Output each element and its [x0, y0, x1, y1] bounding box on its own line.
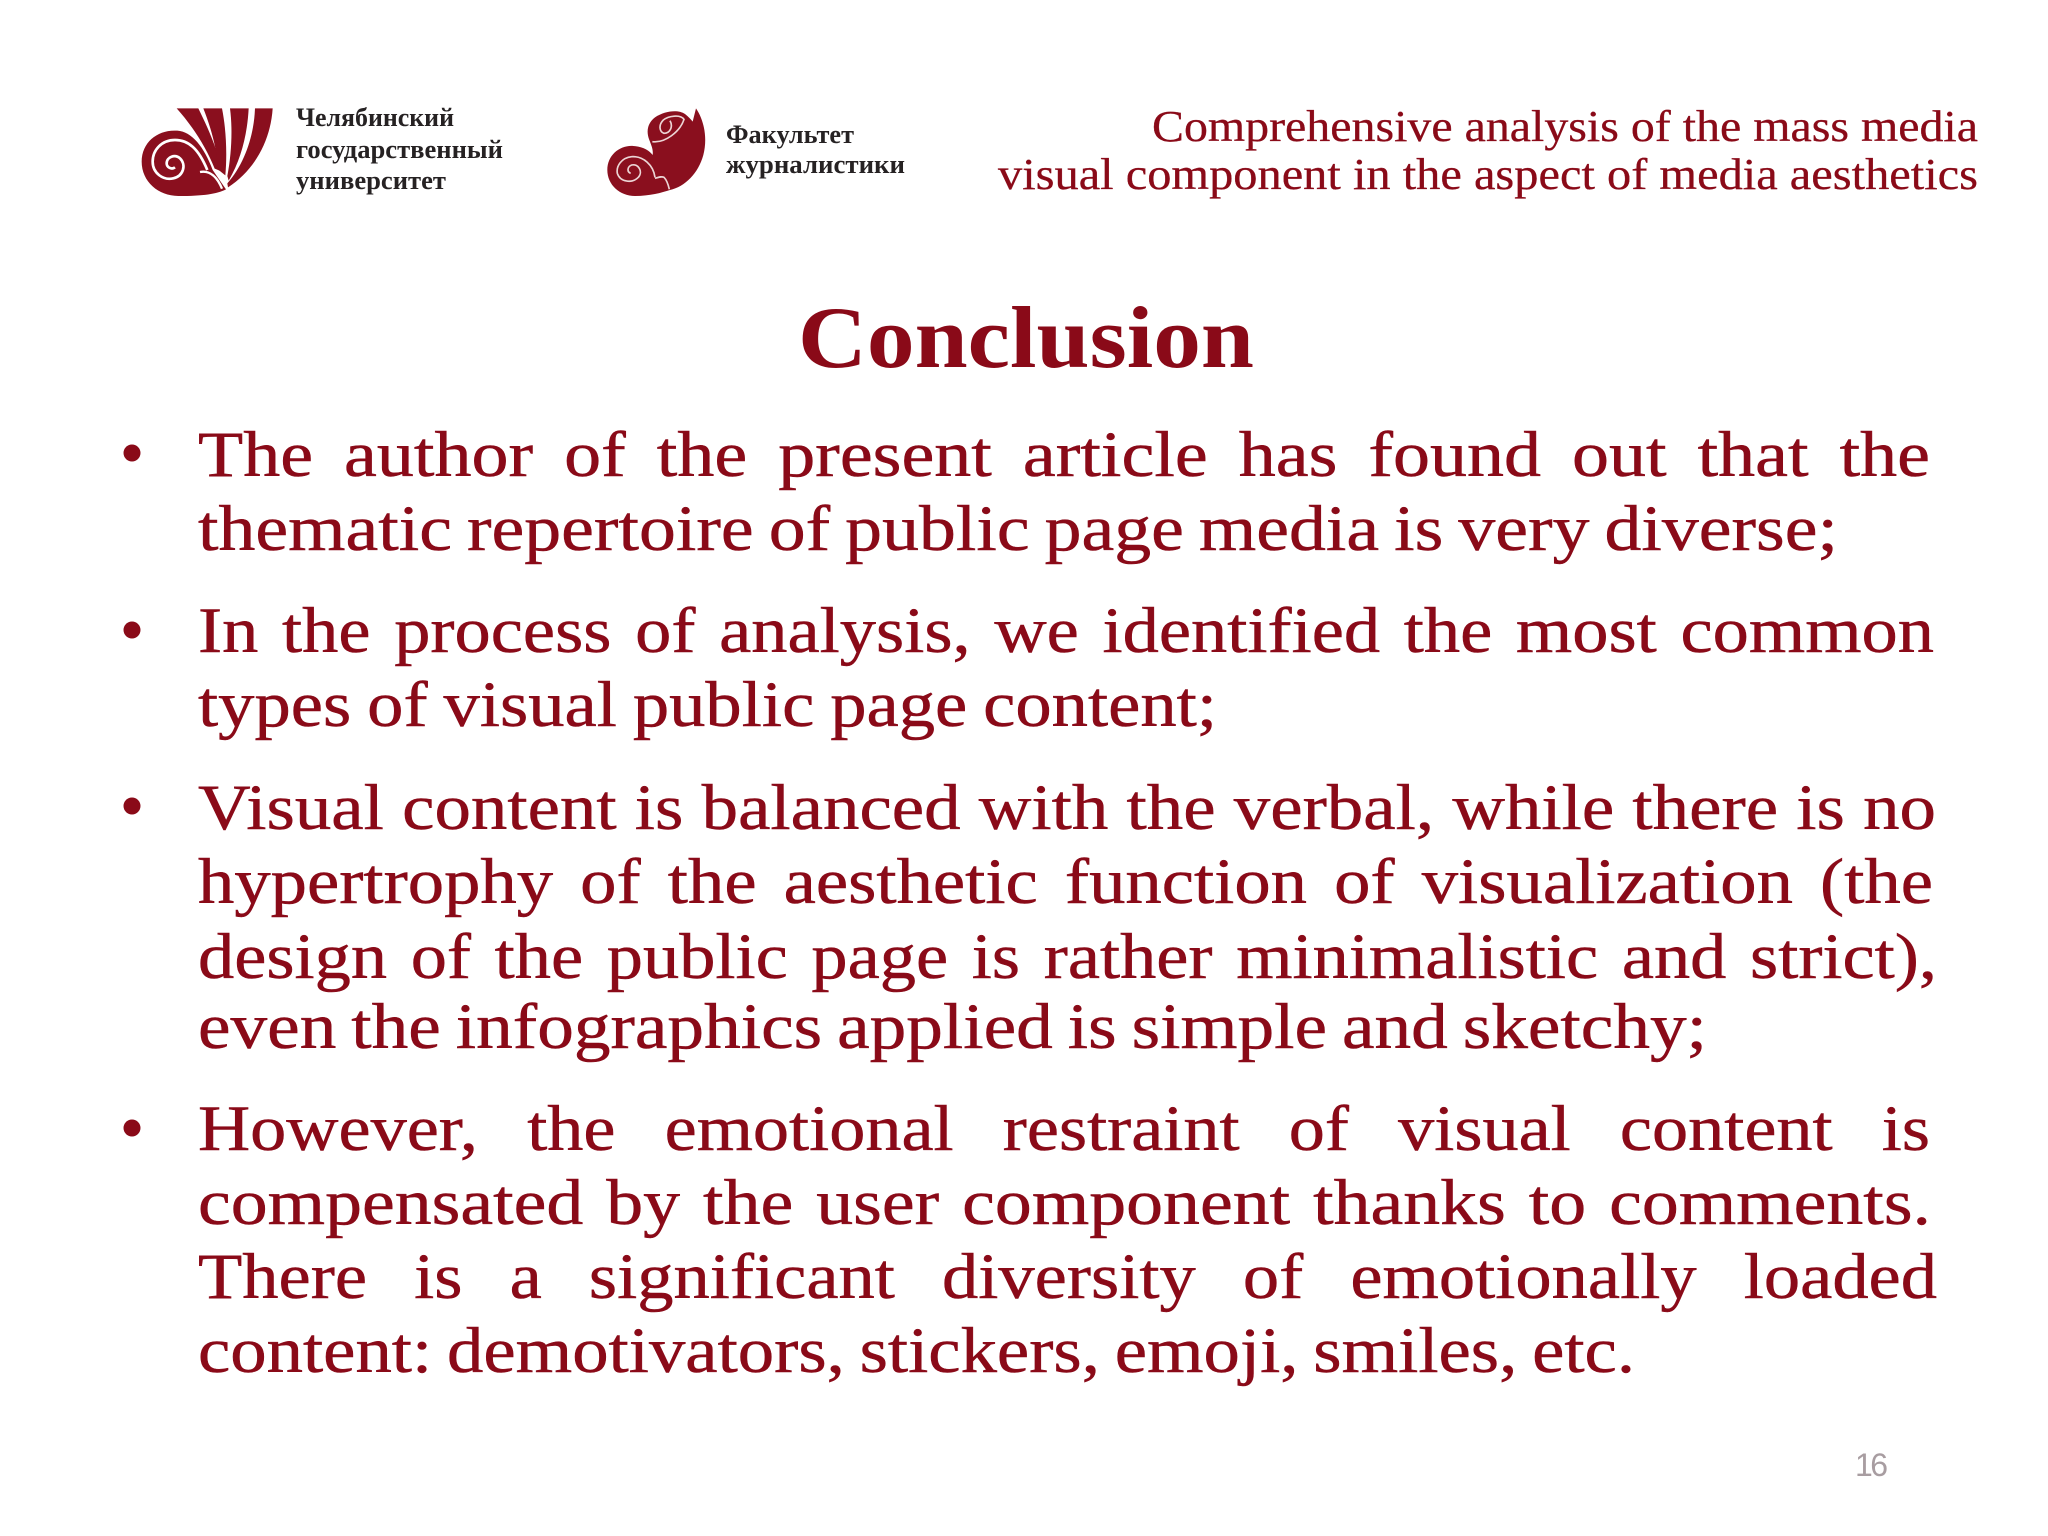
bullet 2	[124, 595, 1934, 741]
bullet 3: design of the public page is rather minimalistic and strict),	[198, 921, 1937, 993]
logo: Faculty of Journalism	[607, 108, 905, 196]
bullet 4: There is a significant diversity of emotionally loaded	[198, 1241, 1937, 1313]
title: Conclusion	[798, 290, 1254, 387]
bullet 4: However, the emotional restraint of visual content is	[198, 1093, 1930, 1165]
header: presentation topic: visual component in the aspect of media aesthetics	[998, 150, 1978, 199]
faculty name	[726, 120, 905, 179]
bullet 4: compensated by the user component thanks to comments.	[198, 1167, 1931, 1239]
bullet 2: In the process of analysis, we identified the most common	[198, 595, 1934, 667]
bullet 2: types of visual public page content;	[198, 669, 1217, 741]
logo: Chelyabinsk State University	[142, 103, 503, 196]
university name: Челябинский	[296, 103, 454, 132]
icon: scroll shell	[607, 108, 705, 196]
page number: 16	[1855, 1447, 1888, 1483]
bullet 3: hypertrophy of the aesthetic function of visualization (the	[198, 846, 1933, 918]
university name: университет	[296, 166, 446, 195]
icon: university shell	[142, 108, 273, 196]
faculty name: Факультет	[726, 120, 854, 149]
bullet 3: even the infographics applied is simple and sketchy;	[198, 991, 1707, 1063]
university name: государственный	[296, 135, 503, 164]
bullet 3	[124, 772, 1937, 1063]
bullet 1	[124, 419, 1930, 565]
header: presentation topic: Comprehensive analysis of the mass media	[1152, 102, 1978, 151]
bullet 3: Visual content is balanced with the verbal, while there is no	[198, 772, 1936, 844]
university name	[296, 103, 503, 195]
bullet 4	[124, 1093, 1937, 1387]
faculty name: журналистики	[726, 150, 905, 179]
header: presentation topic	[998, 102, 1978, 199]
bullet 4: content: demotivators, stickers, emoji, smiles, etc.	[198, 1315, 1635, 1387]
bullet 1: The author of the present article has found out that the	[198, 419, 1930, 491]
bullet 1: thematic repertoire of public page media is very diverse;	[198, 493, 1838, 565]
